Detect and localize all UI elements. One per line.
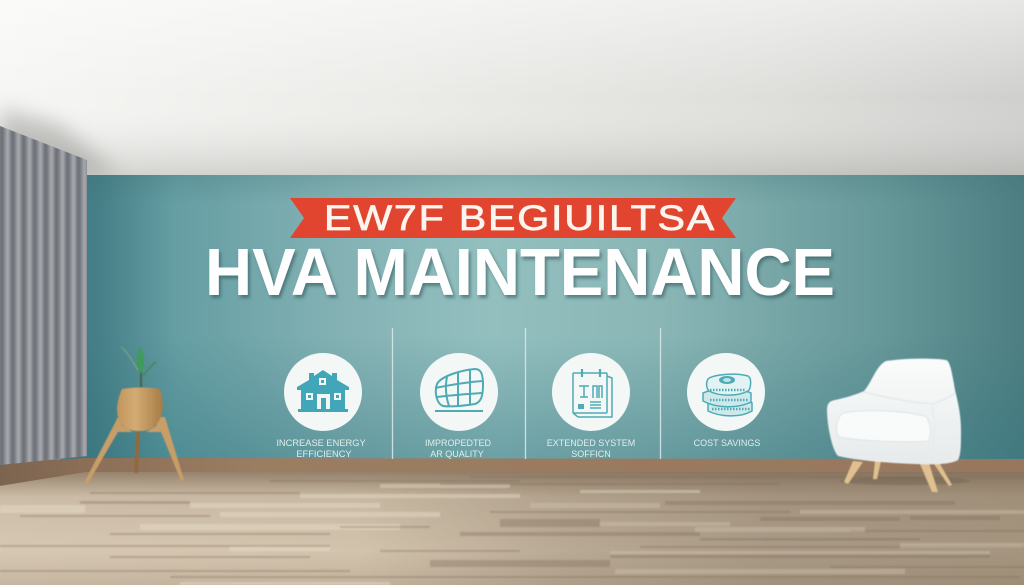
back wall xyxy=(60,175,1024,465)
floor dark grain lines xyxy=(0,476,1024,578)
chair legs xyxy=(844,461,952,492)
plant stand xyxy=(84,347,184,485)
plant xyxy=(121,347,156,389)
wood floor xyxy=(0,472,1024,585)
ceiling xyxy=(0,0,1024,178)
label: extended system: EXTENDED SYSTEM xyxy=(547,438,635,448)
pot xyxy=(117,388,163,431)
label: increase energy efficiency: INCREASE ENERGY xyxy=(276,438,366,448)
benefit: extended system xyxy=(547,353,635,459)
label: improved air quality: IMPROPEDTED xyxy=(425,438,491,448)
title banner: EW7F BEGIUILTSA xyxy=(324,199,716,238)
seat cushion xyxy=(837,411,930,442)
label: improved air quality: AR QUALITY xyxy=(430,449,484,459)
baseboard xyxy=(0,458,1024,486)
label: extended system: SOFFICN xyxy=(571,449,611,459)
tripod legs xyxy=(84,417,184,485)
floor light planks xyxy=(0,484,700,585)
main title: HVA MAINTENANCE xyxy=(205,235,835,310)
icon: notepad xyxy=(552,353,630,431)
floor pale highlights on right xyxy=(530,503,1024,574)
floor shadow xyxy=(840,477,970,485)
chair body xyxy=(827,359,961,464)
icon: stack of coins xyxy=(687,353,765,431)
benefit: increase energy efficiency xyxy=(276,353,366,459)
column dividers xyxy=(392,328,660,459)
benefit: cost savings xyxy=(687,353,765,448)
label: increase energy efficiency: EFFICIENCY xyxy=(296,449,352,459)
icon: house xyxy=(284,353,362,431)
icon: air filter grid xyxy=(420,353,498,431)
curtain xyxy=(0,120,92,470)
label: cost savings: COST SAVINGS xyxy=(694,438,760,448)
benefit: improved air quality xyxy=(420,353,498,459)
armchair xyxy=(827,359,970,492)
